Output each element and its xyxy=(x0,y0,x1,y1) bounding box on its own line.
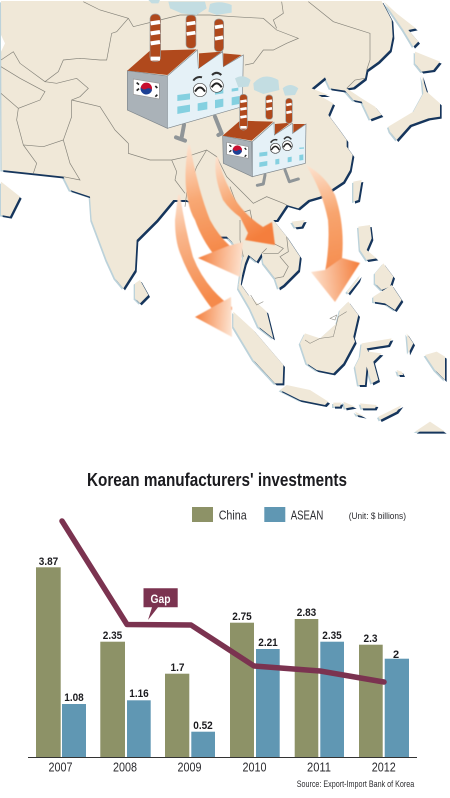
value labels: 2.75 xyxy=(232,611,252,623)
gap callout xyxy=(144,588,178,620)
factory: large xyxy=(127,0,243,141)
value labels: 2 xyxy=(393,649,399,661)
value labels: 0.52 xyxy=(193,720,213,732)
value labels xyxy=(39,556,399,732)
chart title: Korean manufacturers' investments xyxy=(87,470,347,490)
year labels: 2011 xyxy=(307,760,331,775)
factory: small xyxy=(223,76,306,185)
value labels: 2.83 xyxy=(297,607,316,619)
chimneys xyxy=(240,94,292,130)
roof xyxy=(127,49,242,75)
ASEAN label: ASEAN xyxy=(291,508,323,522)
Korean flag xyxy=(133,79,159,99)
Korean flag xyxy=(227,142,248,158)
bars: China xyxy=(36,567,383,757)
smoke xyxy=(148,0,232,15)
value labels: 3.87 xyxy=(39,556,58,568)
unit note: (Unit: $ billions) xyxy=(349,511,406,522)
side wall xyxy=(127,71,167,128)
value labels: 1.7 xyxy=(170,662,184,674)
arrow: to Malay Peninsula xyxy=(186,145,243,277)
year labels xyxy=(48,760,396,775)
windows xyxy=(177,88,239,114)
year labels: 2012 xyxy=(372,760,396,775)
axis baseline xyxy=(28,756,417,758)
front wall xyxy=(167,50,243,128)
arrow: to Sumatra xyxy=(175,195,232,337)
year labels: 2009 xyxy=(178,760,202,775)
side wall xyxy=(223,136,252,177)
arrow: to Borneo xyxy=(306,165,360,302)
ASEAN swatch xyxy=(264,507,285,522)
bars: ASEAN xyxy=(62,642,409,757)
legend xyxy=(192,507,406,522)
gap line xyxy=(62,521,384,682)
smoke xyxy=(235,76,298,96)
roof xyxy=(223,121,305,141)
windows xyxy=(259,147,304,167)
value labels: 1.08 xyxy=(64,692,84,704)
gap callout: Gap xyxy=(150,592,170,606)
chimneys xyxy=(150,14,224,62)
value labels: 2.21 xyxy=(258,637,278,649)
source note: Source: Export-Import Bank of Korea xyxy=(297,779,414,789)
China label: China xyxy=(219,508,247,522)
value labels: 1.16 xyxy=(129,688,149,700)
value labels: 2.35 xyxy=(103,630,122,642)
legs xyxy=(176,117,222,141)
value labels: 2.3 xyxy=(364,633,378,645)
year labels: 2010 xyxy=(242,760,266,775)
eyes xyxy=(270,137,292,153)
year labels: 2007 xyxy=(48,760,72,775)
map of Asia xyxy=(0,1,447,434)
legs xyxy=(257,170,298,185)
year labels: 2008 xyxy=(113,760,137,775)
China swatch xyxy=(192,507,213,522)
eyes xyxy=(193,73,223,97)
front wall xyxy=(252,122,306,177)
arrow: to Indochina xyxy=(215,157,275,245)
value labels: 2.35 xyxy=(322,630,342,642)
